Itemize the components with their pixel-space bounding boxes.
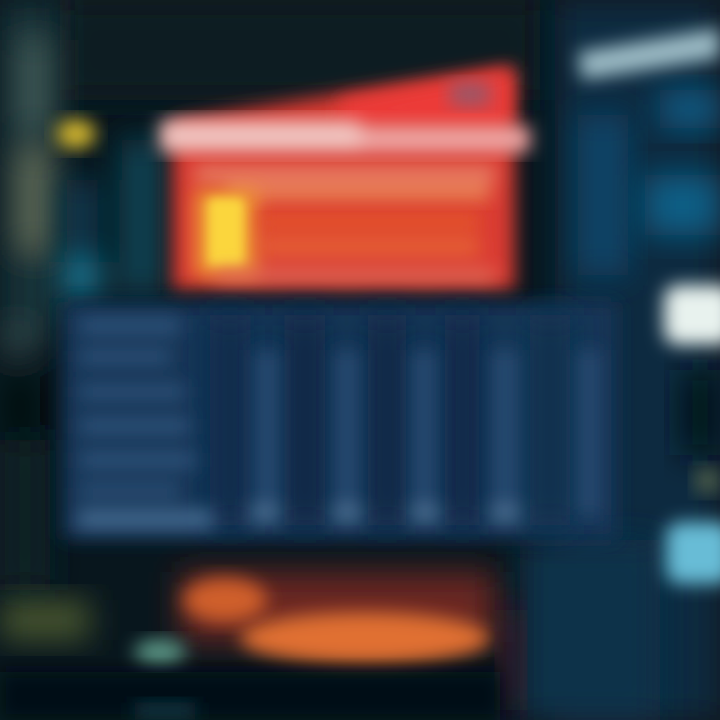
subheading band xyxy=(195,166,495,200)
icon: yellow block xyxy=(195,190,257,276)
panel: teal column xyxy=(64,140,160,298)
table values xyxy=(250,350,600,523)
cyan glow screen xyxy=(666,522,720,584)
text block: orange lines xyxy=(215,212,495,282)
panel: bottom left glow xyxy=(0,600,500,720)
table columns xyxy=(210,315,570,525)
panel: data table xyxy=(62,302,617,540)
panel: left side column xyxy=(0,0,60,590)
panel: red headline poster xyxy=(160,66,530,290)
table row labels xyxy=(78,318,213,528)
panel: right blue screens xyxy=(578,28,720,584)
heading band xyxy=(160,120,530,152)
panel: orange bottom shape xyxy=(180,572,520,710)
icon: yellow light xyxy=(56,119,96,149)
white glow screen xyxy=(664,285,720,345)
